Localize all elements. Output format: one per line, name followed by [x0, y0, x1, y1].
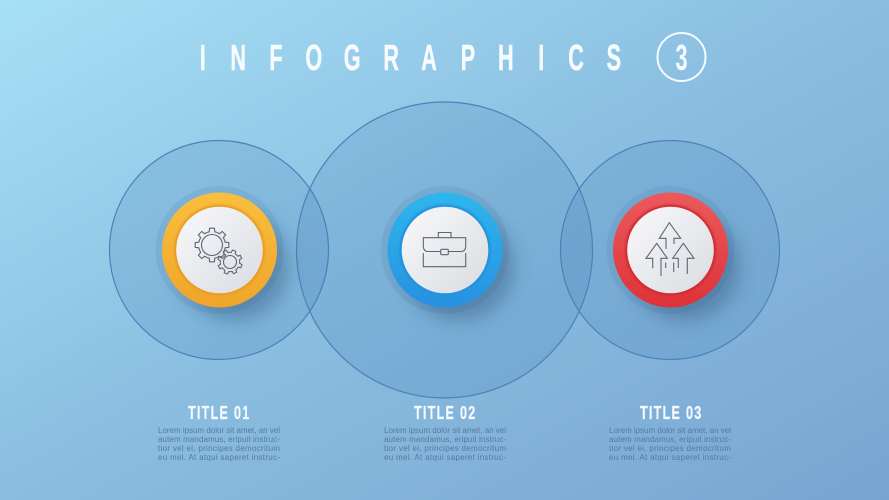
button: red	[606, 186, 740, 321]
text block: title 03: Lorem ipsum dolor sit amet, an vel	[609, 426, 731, 435]
text block: title 03: tior vel ei, principes democritum	[609, 444, 731, 453]
number badge	[658, 33, 706, 81]
large translucent circle: centre	[296, 102, 592, 398]
large translucent circle: left	[110, 140, 328, 360]
text block: title 03: eu mel. At atqui saperet instruc-	[609, 453, 731, 462]
text block: title 03: autem mandamus, eripuit instruc-	[609, 435, 731, 444]
title: INFOGRAPHICS	[200, 38, 621, 78]
text block: title 02: Lorem ipsum dolor sit amet, an vel	[384, 426, 506, 435]
large translucent circle: right	[560, 140, 780, 360]
text block: title 01: tior vel ei, principes democritum	[158, 444, 280, 453]
text block: title 03: TITLE 03	[640, 404, 701, 424]
number badge: 3	[675, 38, 688, 78]
text block: title 02: eu mel. At atqui saperet instruc-	[384, 453, 506, 462]
text block: title 01: Lorem ipsum dolor sit amet, an vel	[158, 426, 280, 435]
text block: title 02: tior vel ei, principes democritum	[384, 444, 506, 453]
text block: title 01: eu mel. At atqui saperet instruc-	[158, 453, 280, 462]
text block: title 02: TITLE 02	[414, 404, 475, 424]
icon: briefcase	[423, 232, 466, 267]
icon: gears	[195, 228, 243, 275]
text block: title 03	[609, 404, 731, 462]
text block: title 01: autem mandamus, eripuit instruc-	[158, 435, 280, 444]
icon: arrows	[646, 223, 694, 276]
button: blue	[381, 186, 514, 321]
text block: title 02: autem mandamus, eripuit instruc-	[384, 435, 506, 444]
text block: title 02	[384, 404, 506, 462]
text block: title 01	[158, 404, 280, 462]
text block: title 01: TITLE 01	[188, 404, 249, 424]
button: yellow	[156, 186, 289, 321]
